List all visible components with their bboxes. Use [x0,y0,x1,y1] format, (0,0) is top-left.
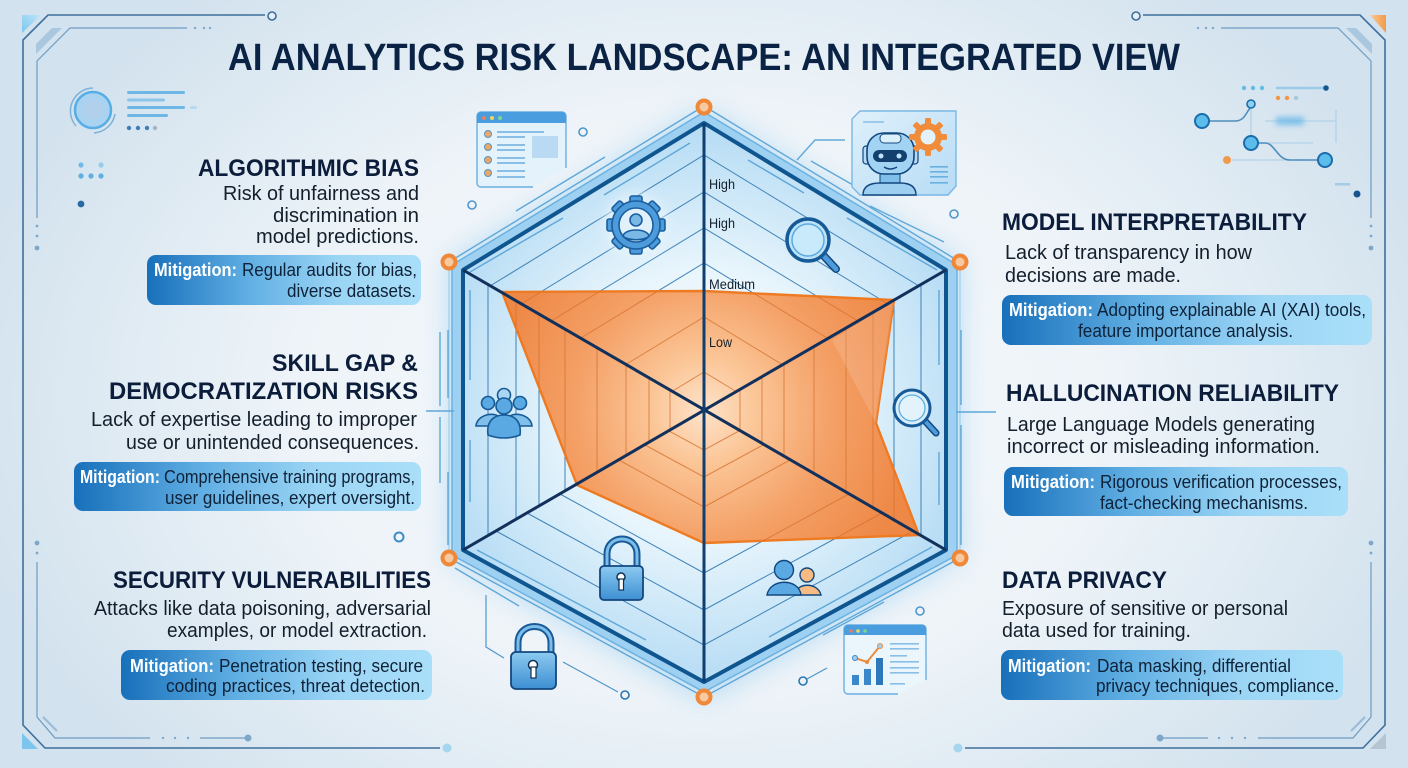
panel: security vulnerabilities: SECURITY VULNERABILITIES [113,567,431,594]
icon: chart browser window [844,625,926,694]
panel: data privacy: privacy techniques, compliance. [1096,676,1339,696]
panel: security vulnerabilities: Mitigation: [130,656,214,676]
icon: browser list window [477,112,566,187]
axis labels: Medium [709,276,755,292]
grid rings [488,155,921,645]
panel: data privacy: data used for training. [1002,620,1191,642]
risk polygon [502,291,919,543]
spokes [463,123,946,682]
panel: model interpretability: Mitigation: [1009,300,1093,320]
icon: people group [476,388,532,438]
grid lines over risk polygon [516,291,912,541]
icon: robot card connector [797,140,845,160]
panel: hallucination reliability: Large Language Models generating [1007,414,1315,436]
outer thin guide lines [426,106,996,697]
risk polygon highlight [832,300,894,423]
panel: hallucination reliability [1004,380,1348,516]
panel: security vulnerabilities: Penetration testing, secure [219,656,423,676]
icon: gear with person [603,192,669,258]
axis labels: High [709,176,735,192]
panel: skill gap and democratization risks: Lack of expertise leading to improper [91,409,417,431]
panel: model interpretability [1002,209,1372,345]
icon: padlock in chart [600,539,643,600]
panel: hallucination reliability: Mitigation: [1011,472,1095,492]
decoration: top-right network nodes [1195,85,1360,198]
panel: data privacy: Exposure of sensitive or personal [1002,598,1288,620]
panel: security vulnerabilities: examples, or model extraction. [167,620,427,642]
title: AI ANALYTICS RISK LANDSCAPE: AN INTEGRATED VIEW [228,37,1180,79]
panel: algorithmic bias: Mitigation: [154,260,237,280]
small connector circles [394,128,958,699]
panel: algorithmic bias: Regular audits for bias, [242,260,417,280]
panel: algorithmic bias: Risk of unfairness and [223,183,419,205]
axis labels [709,176,755,350]
panel: algorithmic bias: discrimination in [273,205,419,227]
icon: padlock outside chart [511,626,556,689]
panel: skill gap and democratization risks: DEMOCRATIZATION RISKS [109,378,418,405]
axis labels: Low [709,334,733,350]
icon: magnifier right [894,390,936,433]
panel: data privacy: Mitigation: [1008,656,1091,676]
hexagon outer band [452,112,957,692]
icon: robot card [852,111,956,195]
panel: model interpretability: Lack of transparency in how [1005,242,1253,264]
vertex markers [440,98,968,706]
icon: magnifier upper right [787,219,836,269]
axis labels: High [709,215,735,231]
panel: security vulnerabilities [94,567,432,700]
panel: algorithmic bias: diverse datasets. [287,281,416,301]
panel: skill gap and democratization risks: Comprehensive training programs, [164,467,415,487]
panel: hallucination reliability: Rigorous verification processes, [1100,472,1342,492]
panel: data privacy: Data masking, differential [1097,656,1291,676]
hexagon glow [449,110,960,700]
decoration: top-left tech orb [70,88,197,207]
panel: model interpretability: Adopting explainable AI (XAI) tools, [1097,300,1366,320]
panel: data privacy: DATA PRIVACY [1002,567,1167,594]
panel: hallucination reliability: fact-checking mechanisms. [1100,493,1308,513]
panel: data privacy [1001,567,1343,700]
panel: model interpretability: feature importance analysis. [1078,321,1293,341]
panel: skill gap and democratization risks: use or unintended consequences. [126,432,419,454]
panel: security vulnerabilities: coding practices, threat detection. [166,676,425,696]
icon: two users [767,560,821,595]
panel: model interpretability: MODEL INTERPRETABILITY [1002,209,1307,236]
panel: model interpretability: decisions are made. [1005,265,1181,287]
panel: hallucination reliability: HALLUCINATION RELIABILITY [1006,380,1339,407]
radar chart [426,98,996,706]
panel: skill gap and democratization risks: SKILL GAP & [272,350,418,377]
panel: security vulnerabilities: Attacks like data poisoning, adversarial [94,598,431,620]
panel: hallucination reliability: incorrect or misleading information. [1007,436,1320,458]
hexagon body [463,123,946,682]
panel: skill gap and democratization risks: user guidelines, expert oversight. [165,488,415,508]
panel: skill gap and democratization risks [74,350,421,511]
panel: algorithmic bias: model predictions. [256,226,419,248]
panel: skill gap and democratization risks: Mitigation: [80,467,160,487]
panel: algorithmic bias [147,155,421,305]
panel: algorithmic bias: ALGORITHMIC BIAS [198,155,419,182]
